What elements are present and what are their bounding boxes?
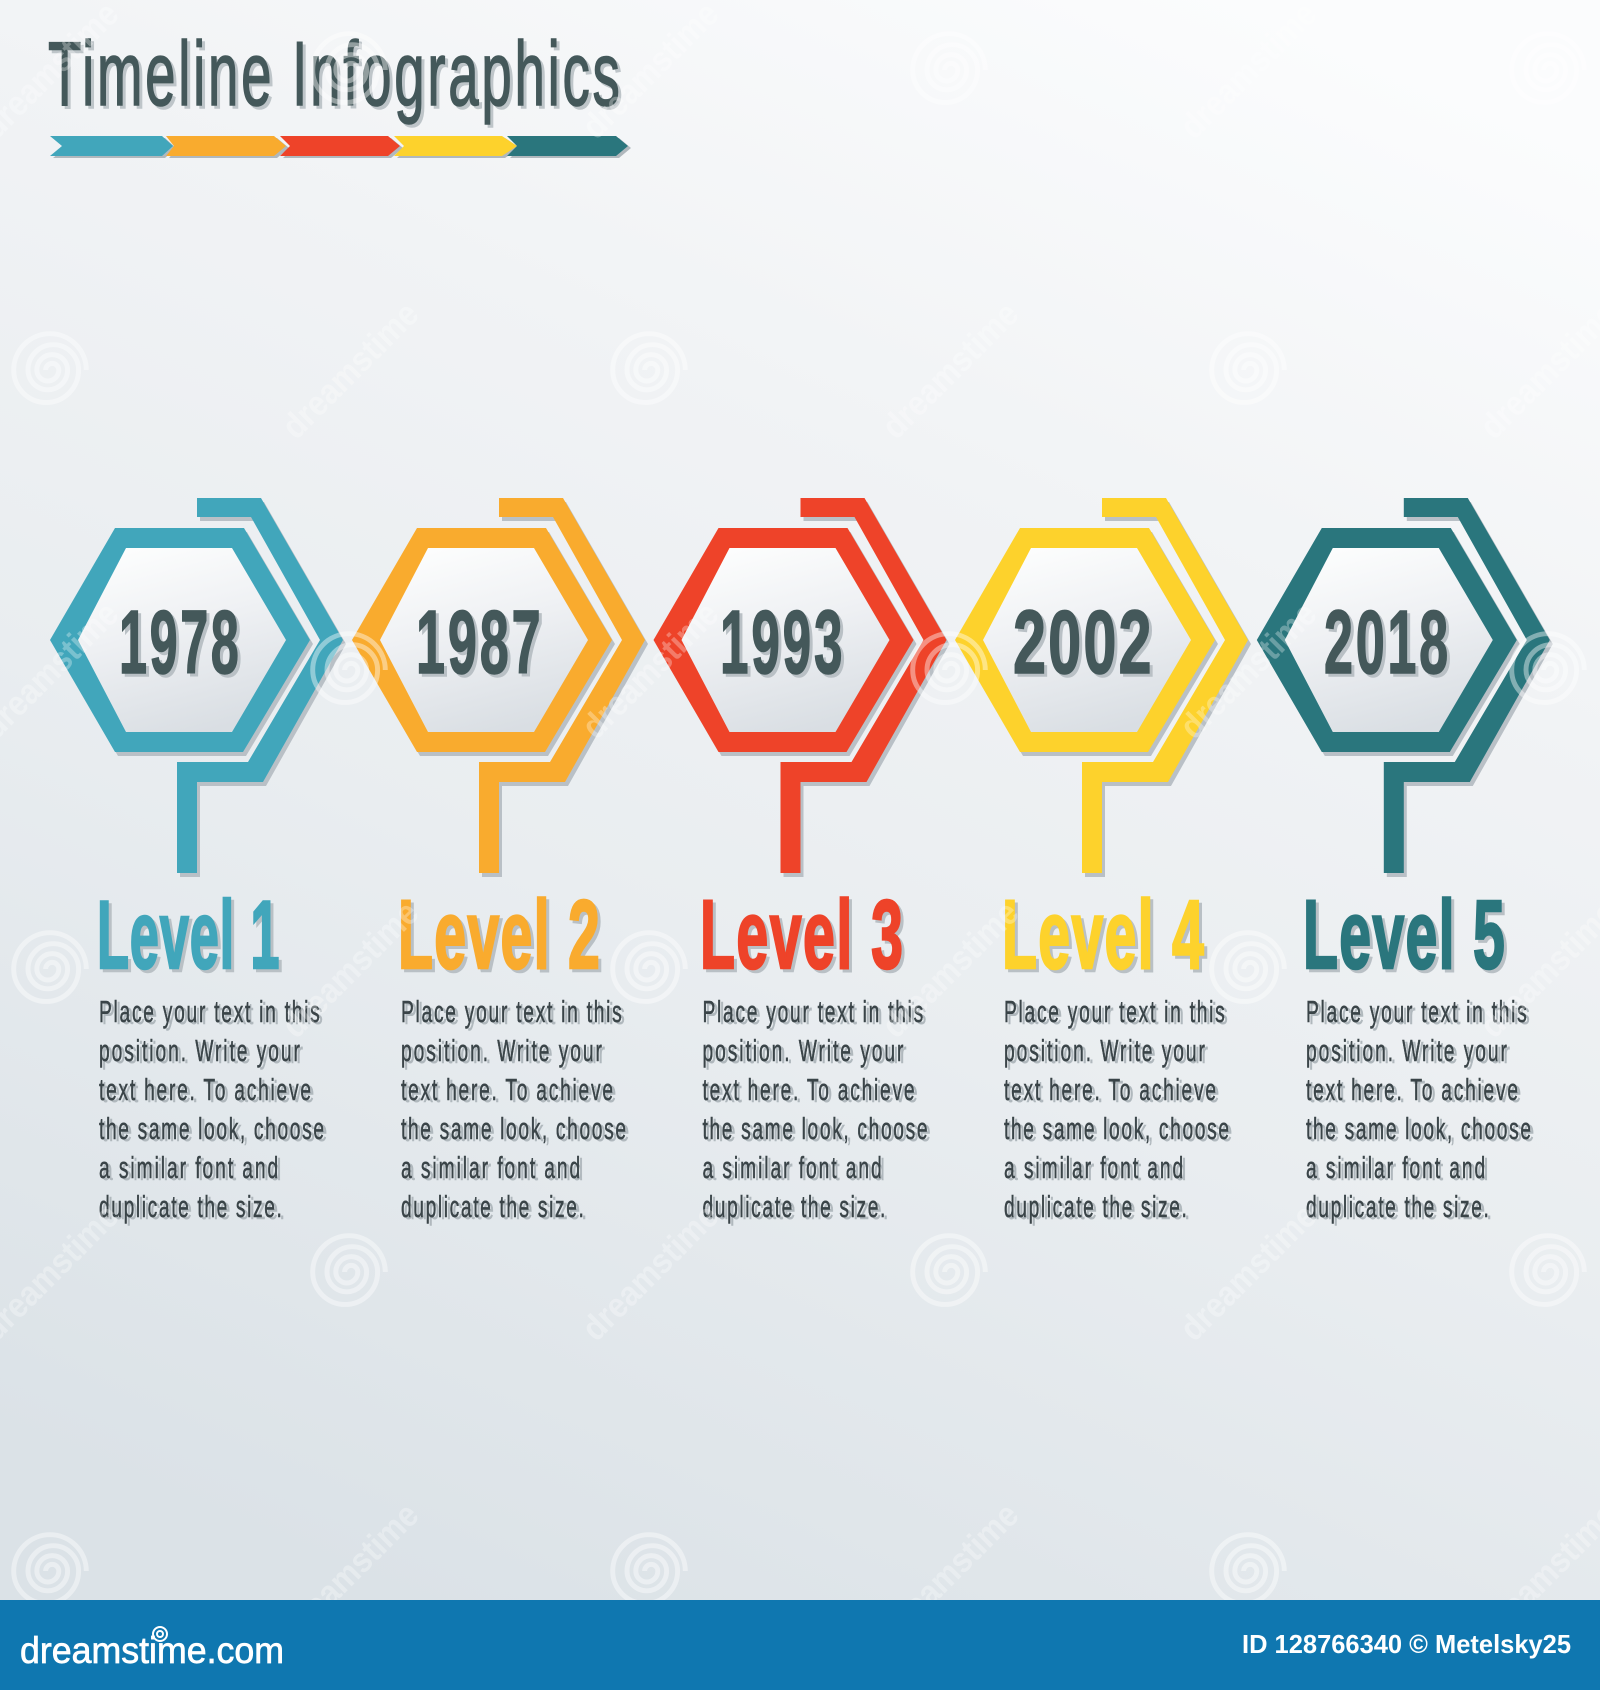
year: 2002: 2002 [1013, 593, 1152, 693]
year: 1987: 1987 [416, 591, 541, 693]
footer image id credit: ID 128766340 © Metelsky25 [1242, 1629, 1571, 1659]
text block: level 5: text here. To achieve [1306, 1074, 1518, 1107]
hexagon icon: level 1 [50, 498, 343, 873]
text block: level 5: Place your text in this [1306, 996, 1527, 1029]
text block: level 1: the same look, choose [99, 1113, 324, 1146]
text block: level 3: Place your text in this [702, 996, 923, 1029]
watermark text: dreamstime [574, 1196, 726, 1348]
heading: Level 5: Level 5 [1303, 880, 1505, 989]
watermark text: dreamstime [274, 294, 426, 446]
year: 1978: 1978 [119, 593, 239, 693]
hexagon icon: level 2 [352, 498, 645, 873]
watermark text: dreamstime [874, 893, 1026, 1045]
hexagon icon: level 5 [1257, 498, 1550, 873]
text block: level 2: position. Write your [401, 1035, 602, 1068]
heading: Level 1: Level 1 [97, 880, 280, 989]
watermark text: dreamstime [874, 1495, 1026, 1647]
title arrow bar [50, 136, 628, 156]
text block: level 2: Place your text in this [401, 996, 622, 1029]
title: Timeline Infographics [48, 23, 620, 124]
footer bar [0, 1600, 1600, 1690]
text block: level 1: a similar font and [99, 1152, 278, 1185]
text block: level 5: position. Write your [1306, 1035, 1507, 1068]
text block: level 4: the same look, choose [1004, 1113, 1229, 1146]
text block: level 1: Place your text in this [99, 996, 320, 1029]
text block: level 4: a similar font and [1004, 1152, 1183, 1185]
watermark text: dreamstime [574, 594, 726, 746]
text block: level 5: a similar font and [1306, 1152, 1485, 1185]
text block: level 5: the same look, choose [1306, 1113, 1531, 1146]
text block: level 5 [1306, 996, 1531, 1224]
footer logo spiral [153, 1627, 167, 1641]
heading: Level 2: Level 2 [398, 880, 600, 989]
watermark text: dreamstime [274, 1495, 426, 1647]
text block: level 1: position. Write your [99, 1035, 300, 1068]
text block: level 3: a similar font and [702, 1152, 882, 1185]
text block: level 3: duplicate the size. [702, 1191, 885, 1224]
text block: level 4: position. Write your [1004, 1035, 1205, 1068]
text block: level 1: text here. To achieve [99, 1074, 311, 1107]
text block: level 3: position. Write your [702, 1035, 904, 1068]
year: 2018: 2018 [1324, 591, 1448, 693]
text block: level 3 [702, 996, 928, 1224]
text block: level 3: text here. To achieve [702, 1074, 915, 1107]
text block: level 2: the same look, choose [401, 1113, 626, 1146]
footer logo: dreamstime.com [20, 1630, 284, 1671]
text block: level 1: duplicate the size. [99, 1191, 282, 1224]
text block: level 2: text here. To achieve [401, 1074, 613, 1107]
hexagon icon: level 3 [654, 498, 946, 873]
text block: level 3: the same look, choose [702, 1113, 928, 1146]
watermark text: dreamstime [874, 294, 1026, 446]
text block: level 2: duplicate the size. [401, 1191, 584, 1224]
text block: level 4: text here. To achieve [1004, 1074, 1216, 1107]
text block: level 2: a similar font and [401, 1152, 580, 1185]
watermark text: dreamstime [274, 893, 426, 1045]
heading: Level 4: Level 4 [1002, 880, 1204, 989]
hexagon icon: level 4 [955, 498, 1248, 873]
watermark text: dreamstime [1172, 1196, 1324, 1348]
text block: level 4: duplicate the size. [1004, 1191, 1187, 1224]
text block: level 4 [1004, 996, 1229, 1224]
watermark text: dreamstime [1172, 594, 1324, 746]
text block: level 2 [401, 996, 626, 1224]
text block: level 4: Place your text in this [1004, 996, 1225, 1029]
heading: Level 3: Level 3 [700, 880, 903, 989]
text block: level 1 [99, 996, 324, 1224]
year: 1993: 1993 [720, 592, 843, 693]
text block: level 5: duplicate the size. [1306, 1191, 1489, 1224]
